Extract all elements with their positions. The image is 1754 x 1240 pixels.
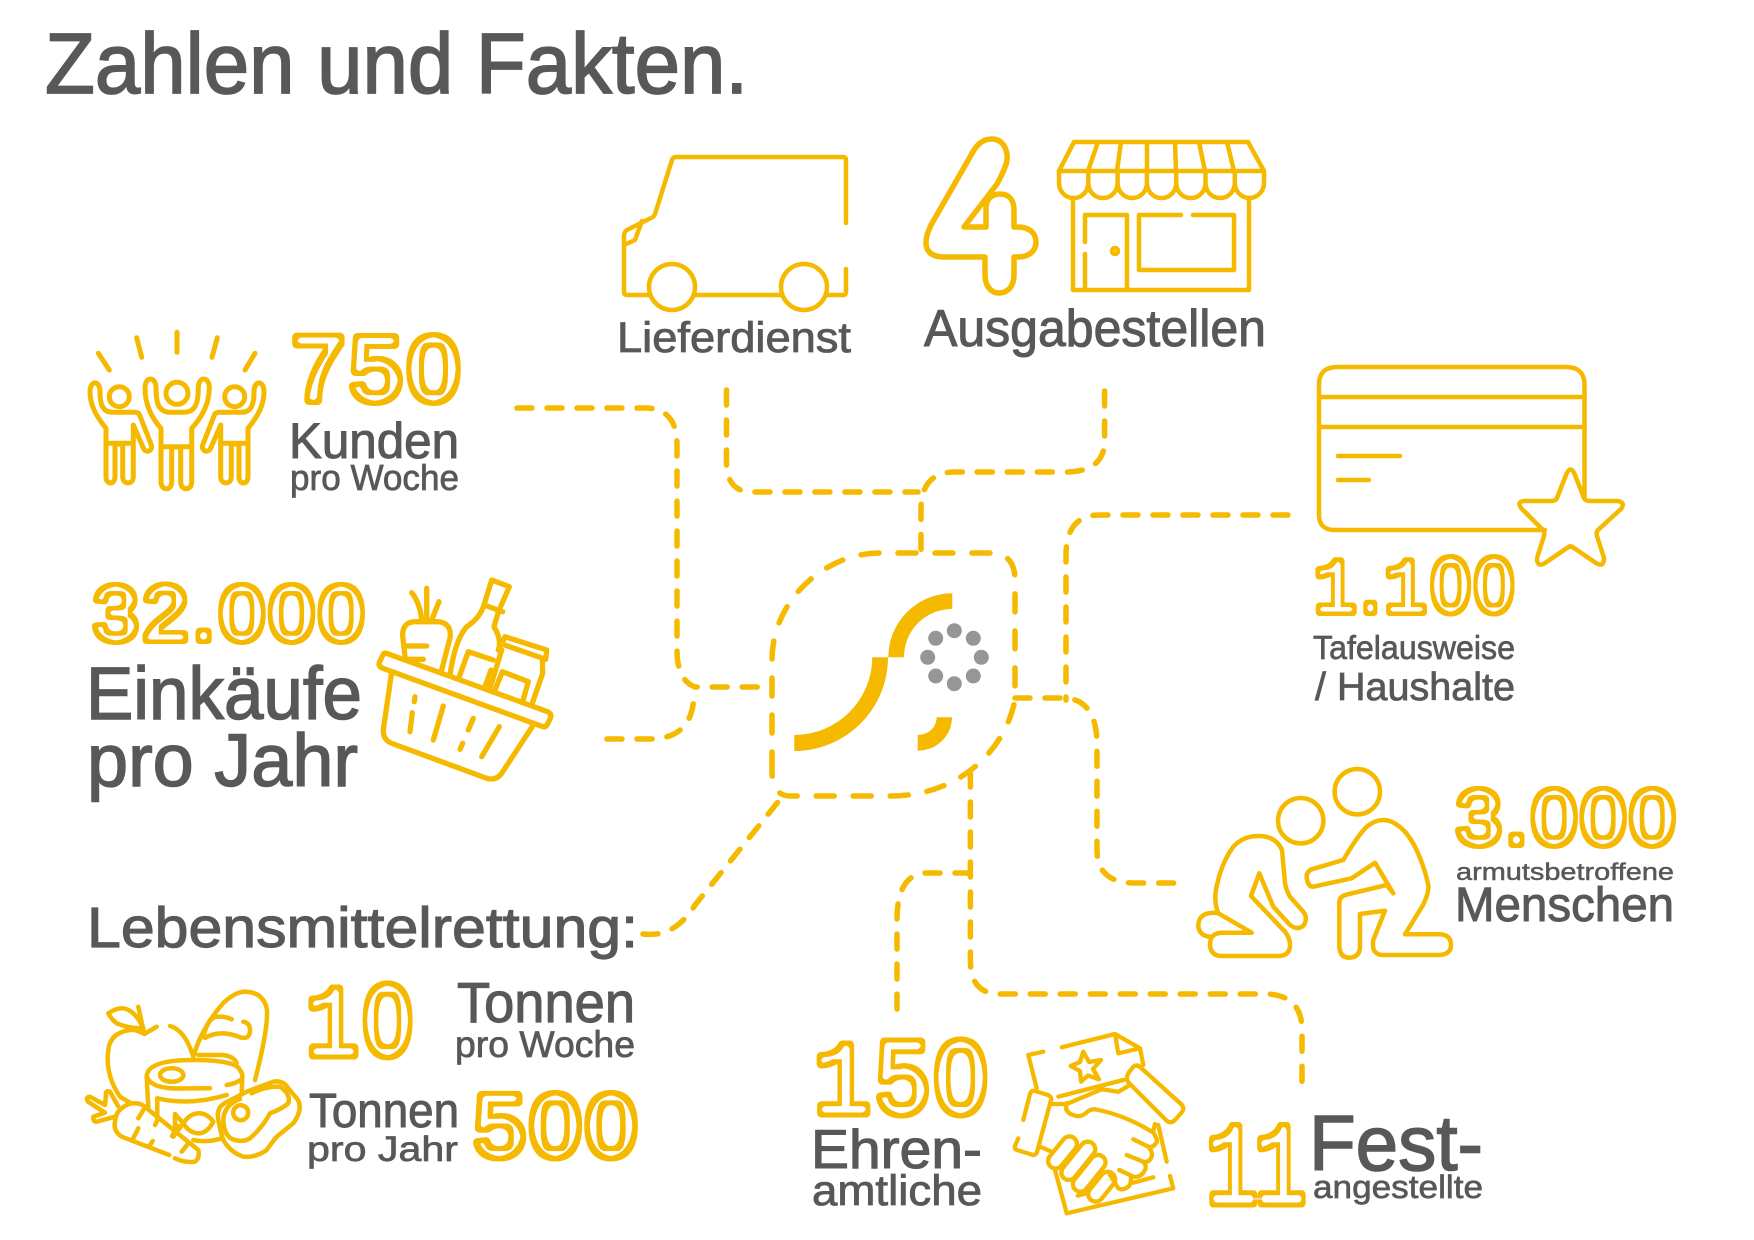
label: Fest-: Fest- (1309, 1099, 1483, 1187)
number: 1.100: 1.100 (1314, 542, 1514, 636)
label: Tafelausweise: Tafelausweise (1313, 629, 1515, 666)
label: Kunden: Kunden (289, 413, 459, 469)
number: 4 (926, 139, 1036, 293)
label: / Haushalte: / Haushalte (1315, 666, 1515, 709)
number: 3.000: 3.000 (1456, 774, 1675, 861)
label: Tonnen (year): Tonnen (309, 1085, 459, 1138)
number: 500: 500 (474, 1077, 637, 1176)
label: Ausgabestellen: Ausgabestellen (924, 300, 1266, 358)
number: 750: 750 (292, 317, 460, 420)
icon: handshake over contract (1015, 1034, 1183, 1213)
title: Zahlen und Fakten. (45, 17, 748, 112)
label: angestellte: angestellte (1313, 1169, 1483, 1205)
label: Ehren-: Ehren- (811, 1118, 982, 1180)
icon: cheering people (90, 332, 264, 489)
number: 10: 10 (306, 965, 412, 1086)
dashed connector lines (517, 390, 1302, 1094)
label: armutsbetroffene: armutsbetroffene (1456, 859, 1674, 886)
heading: Lebensmittelrettung: Lebensmittelrettung: (87, 896, 638, 960)
label: Tonnen (week): Tonnen (457, 971, 635, 1035)
label: Menschen: Menschen (1455, 879, 1674, 932)
label: Einkäufe: Einkäufe (86, 652, 362, 735)
label: pro Jahr (tonnes): pro Jahr (307, 1130, 458, 1169)
label: Lieferdienst: Lieferdienst (617, 314, 851, 362)
label: pro Jahr: pro Jahr (87, 719, 358, 802)
number: 150: 150 (814, 1019, 987, 1144)
number: 32.000: 32.000 (93, 570, 364, 657)
icon: shopping basket (379, 580, 551, 779)
icon: shop (1059, 142, 1264, 290)
number: 11: 11 (1206, 1107, 1306, 1238)
label: pro Woche (tonnes): pro Woche (455, 1024, 635, 1065)
central logo (772, 553, 1015, 796)
icon: rescued food (87, 992, 300, 1162)
icon: membership card with star (1319, 367, 1623, 565)
label: amtliche: amtliche (812, 1167, 982, 1215)
label: pro Woche: pro Woche (290, 457, 459, 498)
icon: delivery van (624, 157, 846, 310)
icon: helping people (1198, 769, 1451, 958)
